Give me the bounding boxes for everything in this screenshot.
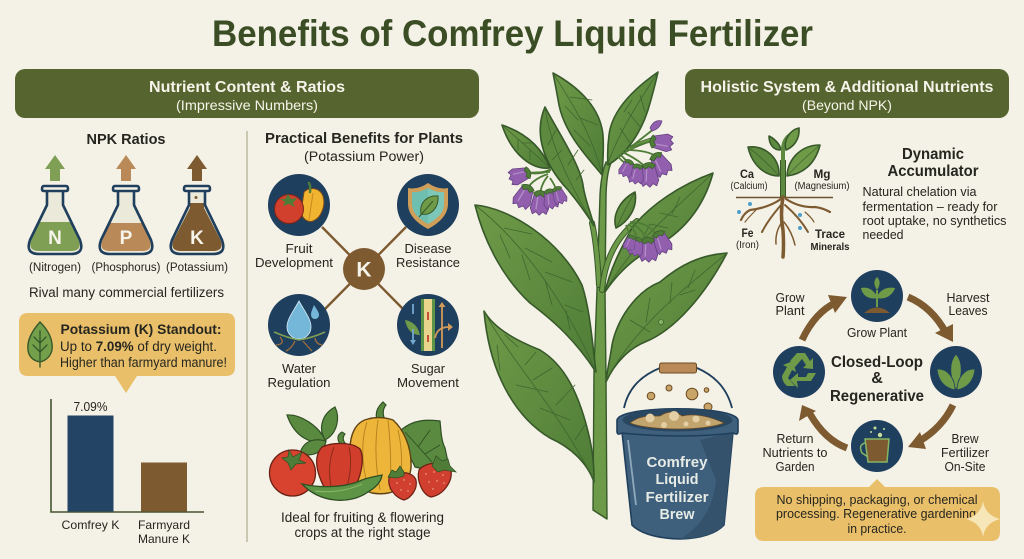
text: cycle stage labels: Leaves (948, 304, 988, 318)
mineral labels: Fe (742, 226, 754, 240)
panel: holistic system header: Holistic System & Additional Nutrients (700, 79, 994, 96)
icon: harvest leaves (930, 346, 982, 398)
benefit labels: Movement (397, 375, 459, 390)
leaf: top right (608, 72, 658, 165)
panel: holistic system header: (Beyond NPK) (802, 97, 892, 113)
bubbles (647, 385, 712, 411)
text: cycle stage labels: Plant (776, 304, 805, 318)
text: cycle stage labels (762, 291, 990, 474)
illustration: bucket of brew (617, 363, 738, 539)
leaf: right middle (605, 173, 713, 292)
mineral labels: (Calcium) (730, 181, 768, 192)
text: cycle stage labels: On-Site (944, 460, 986, 474)
leaf: top left (553, 73, 603, 175)
text: cycle stage labels: Fertilizer (941, 446, 989, 460)
mineral labels: (Iron) (736, 240, 759, 251)
connector lines to K hub (322, 227, 406, 312)
title: Benefits of Comfrey Liquid Fertilizer (212, 13, 813, 54)
icon: recycle (773, 346, 825, 398)
heading: practical benefits: Practical Benefits for Plants (265, 130, 463, 147)
icon: sparkle (966, 501, 1000, 537)
benefit labels: Sugar (411, 361, 446, 376)
flowers: upper right cluster (617, 121, 675, 188)
heading: practical benefits: (Potassium Power) (304, 149, 424, 164)
text: cycle stage labels: Return (776, 432, 814, 446)
illustration: bucket of brew: Liquid (656, 472, 698, 488)
flask labels: (Potassium) (166, 262, 228, 274)
icon: sugar movement (397, 294, 459, 356)
callout: potassium standout: Potassium (K) Standout: (60, 322, 222, 337)
icon: nitrogen flask (29, 155, 81, 254)
bar chart: potassium comparison: Comfrey K (62, 518, 120, 532)
mineral labels: (Magnesium) (794, 181, 850, 192)
text: closed-loop and regenerative: Closed-Loop (831, 354, 923, 371)
benefit labels: Water (282, 361, 317, 376)
benefit labels (255, 241, 460, 390)
icon: grow plant (851, 270, 903, 322)
panel: nutrient content header (15, 69, 479, 118)
icon: phosphorus flask: P (120, 228, 133, 249)
flowers: lower cluster (622, 222, 674, 263)
roots (741, 197, 830, 257)
mineral labels (730, 167, 850, 253)
flask labels: (Phosphorus) (92, 262, 161, 274)
text: closed-loop and regenerative: Regenerative (830, 388, 924, 405)
bar chart: potassium comparison: Manure K (138, 532, 190, 546)
text: ideal for crops: Ideal for fruiting & flowering (281, 510, 444, 525)
benefit labels: Development (255, 255, 333, 270)
icon: leaf (28, 322, 52, 367)
mineral labels: Minerals (810, 241, 850, 253)
panel: holistic system header (685, 69, 1009, 118)
icon: K hub (343, 248, 385, 290)
bar chart: potassium comparison: Farmyard (138, 518, 190, 532)
illustration: bucket of brew: Fertilizer (646, 490, 709, 506)
text: ideal for crops: crops at the right stage (294, 525, 430, 540)
heading: practical benefits (265, 130, 463, 164)
callout: potassium standout: Up to 7.09% of dry weight. (60, 339, 217, 354)
illustration: comfrey plant (475, 72, 727, 519)
icon: K hub: K (356, 258, 372, 282)
text: cycle stage labels: Harvest (946, 291, 990, 305)
leaf: lower left (484, 311, 594, 482)
flowers: left cluster (506, 164, 569, 216)
callout: no shipping: processing. Regenerative gardening (776, 506, 976, 521)
icon: nitrogen flask: N (48, 228, 62, 249)
leaf: big left (475, 205, 596, 372)
text: ideal for crops (281, 510, 444, 540)
mineral labels: Trace (815, 227, 845, 241)
text: cycle stage labels: Garden (776, 460, 815, 474)
mineral labels: Ca (740, 167, 754, 181)
illustration: bucket of brew: Comfrey (646, 455, 708, 471)
callout: no shipping: in practice. (848, 521, 906, 536)
bar chart: potassium comparison: 7.09% (74, 400, 108, 414)
benefit labels: Resistance (396, 255, 460, 270)
stems (525, 138, 657, 519)
leaf: upper left back (502, 125, 550, 168)
icon: water regulation (268, 294, 330, 356)
mineral dots (737, 202, 802, 230)
text: closed-loop and regenerative (830, 354, 924, 405)
benefit labels: Disease (404, 241, 452, 256)
leaf: lower right (606, 253, 727, 382)
cycle arrows (799, 295, 953, 449)
text: dynamic accumulator: needed (862, 228, 904, 242)
leaf: inner left (540, 107, 594, 226)
text: closed-loop and regenerative: & (871, 370, 883, 387)
callout: potassium standout: Higher than farmyard manure! (60, 355, 227, 370)
text: rival fertilizers: Rival many commercial fertilizers (29, 285, 224, 300)
text: dynamic accumulator: Dynamic (902, 146, 964, 163)
text: cycle stage labels: Brew (952, 432, 979, 446)
mineral labels: Mg (814, 167, 830, 181)
text: cycle stage labels: Grow Plant (847, 326, 907, 340)
callout: potassium standout (19, 313, 235, 393)
text: cycle stage labels: Nutrients to (762, 446, 828, 460)
illustration: fruit and vegetables (270, 402, 456, 500)
heading: NPK ratios: NPK Ratios (86, 131, 166, 148)
icon: potassium flask: K (190, 228, 204, 249)
icon: fruit development (268, 174, 330, 236)
callout: no shipping (755, 479, 1000, 541)
icon: plant with roots and minerals (730, 128, 850, 257)
benefit labels: Regulation (268, 375, 330, 390)
panel: nutrient content header: Nutrient Content & Ratios (149, 79, 345, 96)
flask labels (29, 262, 228, 274)
text: dynamic accumulator: Natural chelation via (862, 185, 977, 199)
icon: phosphorus flask (100, 155, 152, 254)
text: dynamic accumulator: root uptake, no synthetics (862, 214, 1006, 228)
leaf: small middle (615, 192, 636, 228)
text: cycle stage labels: Grow (776, 291, 805, 305)
panel: nutrient content header: (Impressive Numbers) (176, 97, 318, 113)
flask labels: (Nitrogen) (29, 262, 81, 274)
icon: brew bucket (851, 420, 903, 472)
callout: no shipping: No shipping, packaging, or chemical (776, 492, 978, 507)
text: dynamic accumulator (862, 146, 1006, 242)
icon: potassium flask (171, 155, 223, 254)
text: dynamic accumulator: fermentation – ready for (862, 200, 998, 214)
benefit labels: Fruit (286, 241, 313, 256)
bar chart: potassium comparison (51, 399, 204, 546)
illustration: bucket of brew: Brew (660, 507, 695, 523)
icon: disease resistance (397, 174, 459, 236)
text: dynamic accumulator: Accumulator (888, 163, 978, 180)
